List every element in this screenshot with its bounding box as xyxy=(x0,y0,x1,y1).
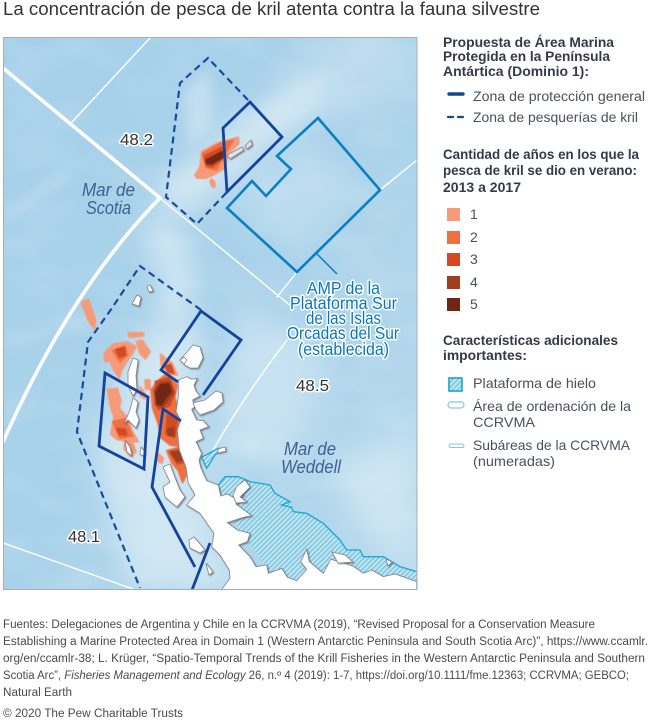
legend heading: additional features: Características adicionales xyxy=(443,333,618,348)
legend: proposed MPA xyxy=(443,35,645,125)
label: Mar de Weddell: Mar de xyxy=(284,439,336,459)
map: islands xyxy=(124,140,392,575)
map: krill fishing north cluster xyxy=(195,137,239,188)
legend heading: proposed MPA: Propuesta de Área Marina xyxy=(443,35,614,50)
legend label: CCAMLR area: CCRVMA xyxy=(473,414,536,430)
legend: years of summer fishing xyxy=(443,147,639,312)
legend heading: additional features: importantes: xyxy=(443,348,527,363)
legend icon: CCAMLR area xyxy=(448,402,464,408)
swatch 5 xyxy=(447,296,478,312)
swatch 1 xyxy=(447,206,478,222)
legend label: CCAMLR area: Área de ordenación de la xyxy=(473,398,631,414)
label: 48.5: 48.5 xyxy=(296,378,329,395)
sources xyxy=(3,619,648,699)
swatch 3 xyxy=(447,251,478,267)
legend heading: proposed MPA: Antártica (Dominio 1): xyxy=(443,64,589,79)
legend heading: proposed MPA: Protegida en la Península xyxy=(443,49,610,64)
legend: additional features xyxy=(443,333,631,469)
label: South Orkney MPA: AMP de la xyxy=(307,278,380,298)
legend heading: years: Cantidad de años en los que la xyxy=(443,147,639,162)
label: South Orkney MPA: (establecida) xyxy=(298,339,389,359)
label: Mar de Weddell: Weddell xyxy=(281,457,342,477)
sources: org/en/ccamlr-38; L. Krüger, “Spatio-Temporal Trends of the Krill Fisheries in the Western Antarctic Peninsula and Southern xyxy=(3,653,645,665)
swatch 2 xyxy=(447,229,478,245)
legend label: CCAMLR subareas xyxy=(473,437,631,469)
map: krill fishing south cluster xyxy=(82,299,190,483)
map: ice shelf xyxy=(202,448,417,590)
legend heading: years: pesca de kril se dio en verano: xyxy=(443,163,637,178)
sources: Scotia Arc”, Fisheries Management and Ecology 26, n.º 4 (2019): 1-7, https://doi.org/10.1111/fme.12363; CCRVMA; GEBCO; xyxy=(3,670,629,682)
label: South Orkney MPA: Orcadas del Sur xyxy=(287,323,399,343)
legend label: CCAMLR subareas: Subáreas de la CCRVMA xyxy=(473,437,631,453)
legend icon: CCAMLR subareas xyxy=(449,444,464,448)
label: South Orkney MPA: Plataforma Sur xyxy=(290,293,397,313)
legend heading: additional features xyxy=(443,333,618,363)
map: seafloor relief xyxy=(3,37,418,590)
sources: Fuentes: Delegaciones de Argentina y Chile en la CCRVMA (2019), “Revised Proposal for a Conservation Measure xyxy=(3,619,595,631)
legend label: krill fishery: Zona de pesquerías de kril xyxy=(473,109,638,125)
label: Mar de Scotia xyxy=(82,180,135,218)
legend icon: dashed line xyxy=(448,116,463,118)
sources: Natural Earth xyxy=(3,687,72,699)
label: South Orkney MPA: de las Islas xyxy=(306,308,381,328)
swatch 5: 5 xyxy=(470,296,478,312)
map: Antarctic Peninsula land xyxy=(176,377,417,592)
map: general protection zones xyxy=(99,102,282,590)
map panel xyxy=(3,37,418,592)
label: 48.2: 48.2 xyxy=(120,132,153,149)
legend icon: ice shelf xyxy=(449,378,462,391)
sources: Establishing a Marine Protected Area in Domain 1 (Western Antarctic Peninsula and South Scotia Arc)”, https://www.ccamlr. xyxy=(3,636,648,648)
label: 48.1: 48.1 xyxy=(68,529,100,546)
label: Mar de Scotia: Scotia xyxy=(86,198,131,218)
legend label: ice shelf: Plataforma de hielo xyxy=(473,375,596,391)
legend icon: solid line xyxy=(449,92,463,96)
label: Mar de Weddell xyxy=(281,439,342,477)
map frame xyxy=(4,38,417,590)
legend heading: years: 2013 a 2017 xyxy=(443,180,521,195)
swatch 3: 3 xyxy=(470,251,478,267)
map: South Orkney MPA boundary xyxy=(227,118,380,274)
map: krill fishery zone dashed south xyxy=(77,266,201,588)
swatch 4 xyxy=(447,274,478,290)
label: South Orkney MPA xyxy=(287,278,399,359)
map: CCAMLR area and subarea lines xyxy=(3,38,417,589)
map: sea background xyxy=(3,37,418,590)
legend label: general protection: Zona de protección general xyxy=(473,88,645,104)
legend heading: proposed MPA xyxy=(443,35,614,79)
copyright: © 2020 The Pew Charitable Trusts xyxy=(3,708,183,720)
legend label: CCAMLR area xyxy=(473,398,631,430)
swatch 1: 1 xyxy=(470,206,478,222)
legend heading: years xyxy=(443,147,639,195)
swatch 4: 4 xyxy=(470,274,478,290)
map: krill fishery zone dashed north xyxy=(166,58,248,224)
label: Mar de Scotia: Mar de xyxy=(82,180,135,200)
swatch 2: 2 xyxy=(470,229,478,245)
legend label: CCAMLR subareas: (numeradas) xyxy=(473,453,555,469)
